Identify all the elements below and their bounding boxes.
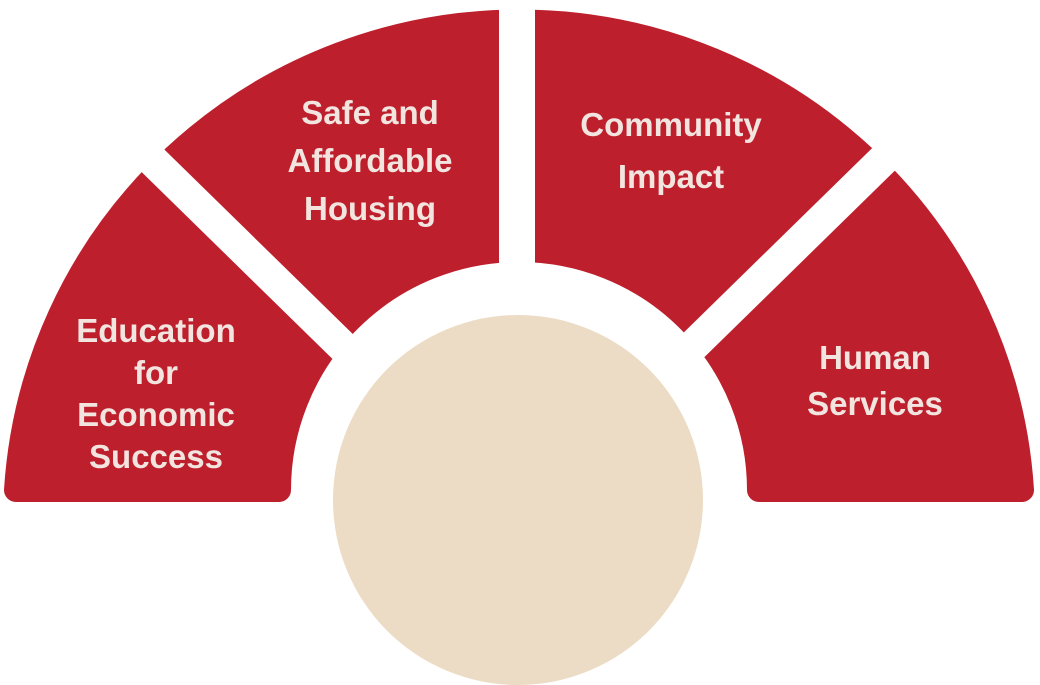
label: Safe and Affordable Housing	[288, 94, 452, 227]
label: Education for Economic Success: Economic	[77, 396, 235, 433]
label: Community Impact: Community	[580, 106, 762, 143]
label: Community Impact	[580, 106, 762, 195]
label: Human Services	[807, 339, 943, 422]
label: Education for Economic Success: for	[134, 354, 178, 391]
label: Community Impact: Impact	[618, 158, 724, 195]
label: Safe and Affordable Housing: Safe and	[301, 94, 439, 131]
label: Education for Economic Success: Education	[76, 312, 236, 349]
label: Human Services: Services	[807, 385, 943, 422]
label: Education for Economic Success: Success	[89, 438, 223, 475]
label: Safe and Affordable Housing: Affordable	[288, 142, 452, 179]
label: Education for Economic Success	[76, 312, 236, 475]
label: Safe and Affordable Housing: Housing	[304, 190, 436, 227]
center circle	[333, 315, 703, 685]
fan of four segments	[16, 0, 1022, 490]
label: Human Services: Human	[819, 339, 931, 376]
